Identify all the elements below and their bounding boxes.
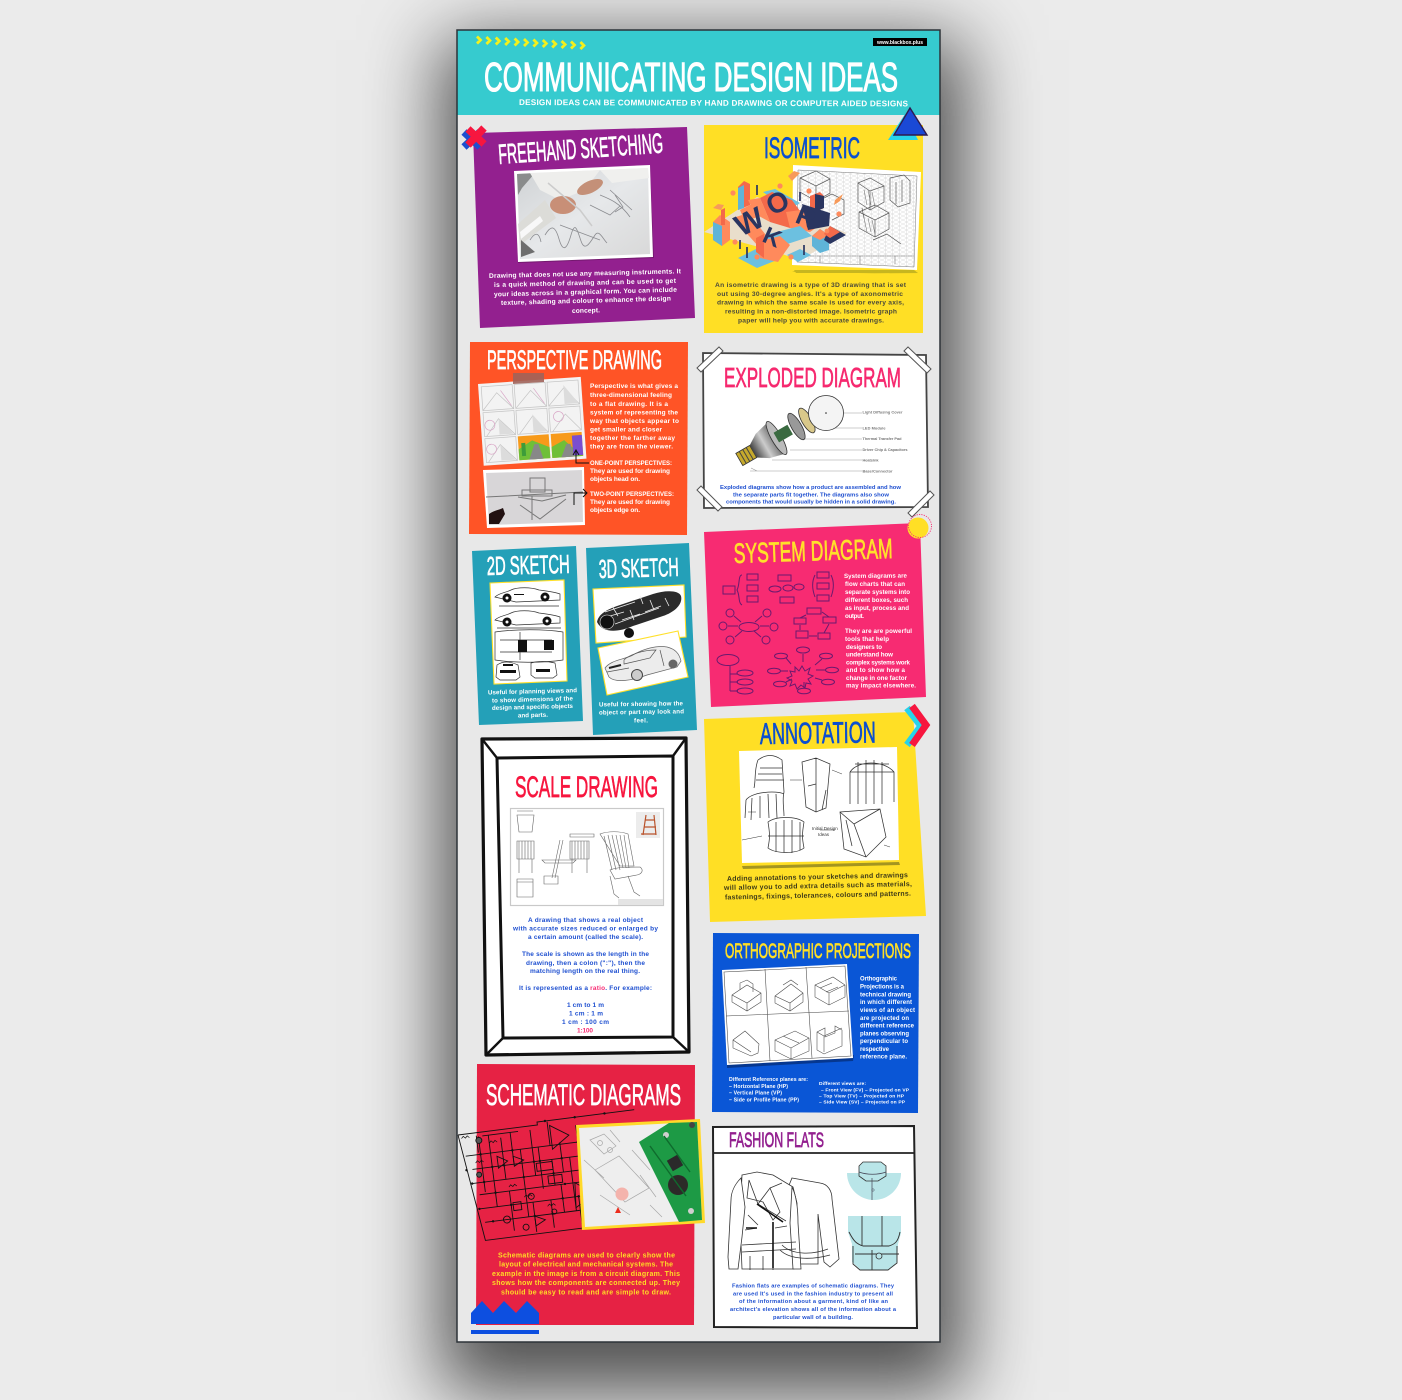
description: particular wall of a building. — [773, 1315, 853, 1321]
panel: 2D sketch — [472, 546, 583, 725]
panel: fashion flats — [713, 1126, 917, 1328]
description — [723, 872, 912, 901]
reference planes list: – Horizontal Plane (HP) — [729, 1084, 788, 1090]
description: architect's elevation shows all of the information about a — [730, 1307, 897, 1313]
panel: scale drawing — [482, 738, 689, 1055]
description: layout of electrical and mechanical systems. The — [499, 1262, 673, 1268]
description: should be easy to read and are simple to draw. — [501, 1290, 671, 1296]
description: concept. — [572, 307, 600, 315]
views list — [819, 1081, 910, 1106]
description: technical drawing — [860, 992, 911, 998]
exploded bulb diagram: LED Module — [862, 426, 886, 430]
panel: orthographic projections — [712, 933, 919, 1113]
description: and parts. — [518, 712, 548, 719]
panel: isometric — [704, 108, 927, 333]
description: Useful for showing how the — [599, 700, 684, 708]
reference planes list: – Vertical Plane (VP) — [729, 1090, 782, 1096]
projection drawings sheet — [722, 964, 854, 1068]
panel: freehand sketching — [464, 127, 695, 328]
description: tools that help — [845, 636, 889, 643]
annotated chair sketches: Initial Design — [812, 826, 838, 831]
description: views of an object — [860, 1008, 915, 1014]
sports car sketch image — [598, 631, 688, 695]
jacket drawing — [728, 1172, 839, 1270]
description: output. — [845, 613, 864, 620]
exploded bulb diagram: Base/Connector — [862, 468, 893, 474]
description: Schematic diagrams are used to clearly show the — [498, 1252, 675, 1260]
tape — [513, 373, 544, 384]
description: to show dimensions of the — [492, 695, 574, 704]
description — [860, 976, 915, 1060]
heading: 3D SKETCH — [598, 552, 679, 584]
heading: ISOMETRIC — [764, 132, 860, 165]
subtitle: DESIGN IDEAS CAN BE COMMUNICATED BY HAND DRAWING OR COMPUTER AIDED DESIGNS — [519, 98, 909, 108]
description: Perspective is what gives a — [590, 383, 678, 390]
icon: yellow circle — [908, 514, 932, 538]
description: respective — [860, 1047, 890, 1053]
description: Adding annotations to your sketches and drawings — [727, 872, 908, 883]
chair technical drawing — [510, 808, 664, 906]
heading: SYSTEM DIAGRAM — [733, 533, 893, 569]
description: your ideas across in a graphical form. You can include — [494, 287, 677, 298]
header band — [457, 30, 940, 115]
heading: ORTHOGRAPHIC PROJECTIONS — [725, 940, 911, 963]
description: ONE-POINT PERSPECTIVES: — [590, 461, 672, 467]
sketch grid sheet — [478, 377, 586, 466]
description: are projected on — [860, 1016, 909, 1022]
description: They are are powerful — [845, 628, 912, 635]
description — [488, 687, 577, 719]
website badge — [873, 38, 927, 46]
description: may impact elsewhere. — [846, 682, 916, 690]
poster border — [457, 30, 940, 1342]
description: paper will help you with accurate drawings. — [738, 318, 884, 324]
description: perpendicular to — [860, 1039, 908, 1045]
description: is a quick method of drawing and can be used to get — [494, 278, 677, 289]
description — [512, 917, 658, 1034]
description: Exploded diagrams show how a product are assembled and how — [720, 485, 901, 491]
flow chart sketches — [717, 572, 838, 694]
description: they are from the viewer. — [590, 444, 673, 450]
icon: blue mountains and bar — [471, 1301, 539, 1334]
description: The scale is shown as the length in the — [522, 951, 649, 958]
circuit diagram — [457, 1109, 648, 1242]
description: out using 30-degree angles. It's a type of axonometric — [717, 291, 903, 298]
description: feel. — [634, 718, 648, 724]
description: System diagrams are — [844, 573, 908, 580]
photo: schematic and circuit board — [576, 1119, 705, 1230]
description: change in one factor — [846, 675, 908, 682]
panel: annotation — [704, 706, 926, 922]
panel: perspective drawing — [469, 342, 688, 535]
description: understand how — [846, 652, 893, 658]
waistcoat piece — [848, 1216, 901, 1270]
description: TWO-POINT PERSPECTIVES: — [590, 492, 674, 498]
reference planes list — [729, 1077, 808, 1104]
description: Projections is a — [860, 984, 905, 990]
exploded bulb diagram — [730, 396, 908, 476]
panel: 3D sketch — [586, 543, 697, 735]
description: together the farther away — [590, 435, 675, 442]
description: different boxes, such — [845, 597, 908, 604]
description — [730, 1284, 897, 1321]
exploded bulb diagram: Light Diffusing Cover — [862, 410, 903, 414]
description: way that objects appear to — [589, 418, 679, 425]
description: and to show how a — [846, 667, 906, 674]
annotated chair sketches — [739, 747, 900, 869]
annotated chair sketches: Ideas — [818, 832, 830, 837]
views list: – Side View (SV) – Projected on PP — [819, 1100, 906, 1106]
description: Drawing that does not use any measuring instruments. It — [489, 268, 682, 280]
title: COMMUNICATING DESIGN IDEAS — [484, 54, 898, 100]
description: matching length on the real thing. — [530, 968, 640, 975]
description: get smaller and closer — [590, 426, 662, 434]
description: 1 cm to 1 m — [567, 1002, 604, 1009]
heading: 2D SKETCH — [486, 549, 570, 581]
car wireframe image — [593, 585, 686, 643]
photo: two-point perspective sketch — [483, 467, 585, 528]
tape corners — [697, 347, 934, 517]
photo: hands sketching — [514, 165, 654, 263]
description: are used It's used in the fashion industry to present all — [733, 1292, 893, 1298]
panel: exploded diagram — [697, 347, 934, 517]
description: Fashion flats are examples of schematic diagrams. They — [732, 1284, 895, 1290]
description: objects edge on. — [590, 507, 640, 514]
description: They are used for drawing — [590, 468, 670, 475]
description: Useful for planning views and — [488, 687, 577, 696]
description: system of representing the — [590, 410, 678, 416]
reference planes list: – Side or Profile Plane (PP) — [729, 1098, 799, 1104]
description: A drawing that shows a real object — [528, 917, 644, 924]
description: object or part may look and — [599, 708, 684, 716]
description: will allow you to add extra details such as materials, — [723, 881, 912, 892]
description: the separate parts fit together. The diagrams also show — [733, 492, 889, 498]
description: a certain amount (called the scale). — [528, 934, 643, 941]
description: with accurate sizes reduced or enlarged by — [512, 926, 658, 932]
exploded bulb diagram: Driver Chip & Capacitors — [862, 447, 908, 452]
heading: SCHEMATIC DIAGRAMS — [486, 1079, 681, 1112]
heading: FASHION FLATS — [729, 1129, 824, 1152]
description — [844, 573, 916, 690]
icon: yellow chevrons — [477, 36, 584, 49]
isometric WORK illustration: R — [792, 200, 821, 235]
description: to a flat drawing. It is a — [590, 401, 668, 408]
description: texture, shading and colour to enhance the design — [501, 296, 671, 307]
panel: schematic diagrams — [457, 1064, 705, 1334]
icon: red cross — [464, 128, 484, 147]
description: Orthographic — [860, 976, 898, 982]
isometric graph paper — [792, 165, 921, 274]
description: fastenings, fixings, tolerances, colours and patterns. — [725, 891, 911, 901]
description: drawing in which the same scale is used for every axis, — [717, 300, 904, 306]
description: in which different — [860, 1000, 912, 1006]
heading: SCALE DRAWING — [515, 771, 658, 804]
description: 1 cm : 100 cm — [562, 1019, 609, 1026]
description: 1:100 — [577, 1028, 593, 1034]
isometric WORK illustration — [704, 171, 847, 268]
views list: – Front View (FV) – Projected on VP — [821, 1088, 910, 1094]
heading: FREEHAND SKETCHING — [497, 128, 664, 170]
website badge: www.blackbox.plus — [876, 40, 923, 46]
description: designers to — [846, 644, 882, 651]
description: of the information about a garment, kind of like an — [739, 1299, 889, 1305]
description: planes observing — [860, 1032, 909, 1038]
description: It is represented as a ratio. For example: — [519, 985, 652, 992]
panel: system diagram — [704, 514, 932, 707]
description: three-dimensional feeling — [590, 392, 672, 399]
isometric WORK illustration: W — [730, 201, 770, 243]
exploded bulb diagram: Thermal Transfer Pad — [862, 436, 902, 441]
description — [599, 700, 684, 724]
description — [489, 268, 682, 315]
exploded bulb diagram: Heatsink — [862, 458, 879, 462]
description: example in the image is from a circuit diagram. This — [492, 1271, 680, 1278]
arrow: one-point — [573, 450, 589, 463]
description: 1 cm : 1 m — [569, 1010, 603, 1018]
isometric WORK illustration: K — [759, 222, 786, 254]
description: design and specific objects — [492, 703, 574, 712]
views list: – Top View (TV) – Projected on HP — [819, 1094, 905, 1100]
description: different reference — [860, 1024, 915, 1030]
views list: Different views are: — [819, 1081, 866, 1087]
description — [589, 383, 679, 514]
description: reference plane. — [860, 1054, 907, 1060]
description: drawing, then a colon (":"), then the — [526, 960, 645, 967]
poster background — [457, 30, 940, 1342]
description: complex systems work — [846, 660, 911, 666]
description: separate systems into — [845, 589, 910, 596]
reference planes list: Different Reference planes are: — [729, 1077, 808, 1083]
description: shows how the components are connected up. They — [492, 1280, 680, 1287]
icon: triangle — [888, 108, 927, 140]
description — [715, 282, 907, 324]
description — [492, 1252, 680, 1296]
description: components that would usually be hidden in a solid drawing. — [726, 500, 896, 506]
isometric WORK illustration: O — [761, 184, 794, 221]
heading: ANNOTATION — [760, 716, 876, 751]
description: resulting in a non-distorted image. Isometric graph — [725, 308, 897, 316]
collar piece — [847, 1162, 901, 1200]
description: They are used for drawing — [590, 499, 670, 506]
description: objects head on. — [590, 476, 640, 483]
description: flow charts that can — [845, 581, 905, 588]
description: as input, process and — [845, 605, 909, 612]
heading: EXPLODED DIAGRAM — [724, 362, 901, 393]
description — [720, 485, 901, 506]
heading: PERSPECTIVE DRAWING — [487, 345, 662, 375]
car blueprint image — [490, 580, 567, 684]
icon: zigzag — [907, 706, 926, 745]
arrow: two-point — [574, 489, 587, 505]
description: An isometric drawing is a type of 3D drawing that is set — [715, 282, 907, 289]
